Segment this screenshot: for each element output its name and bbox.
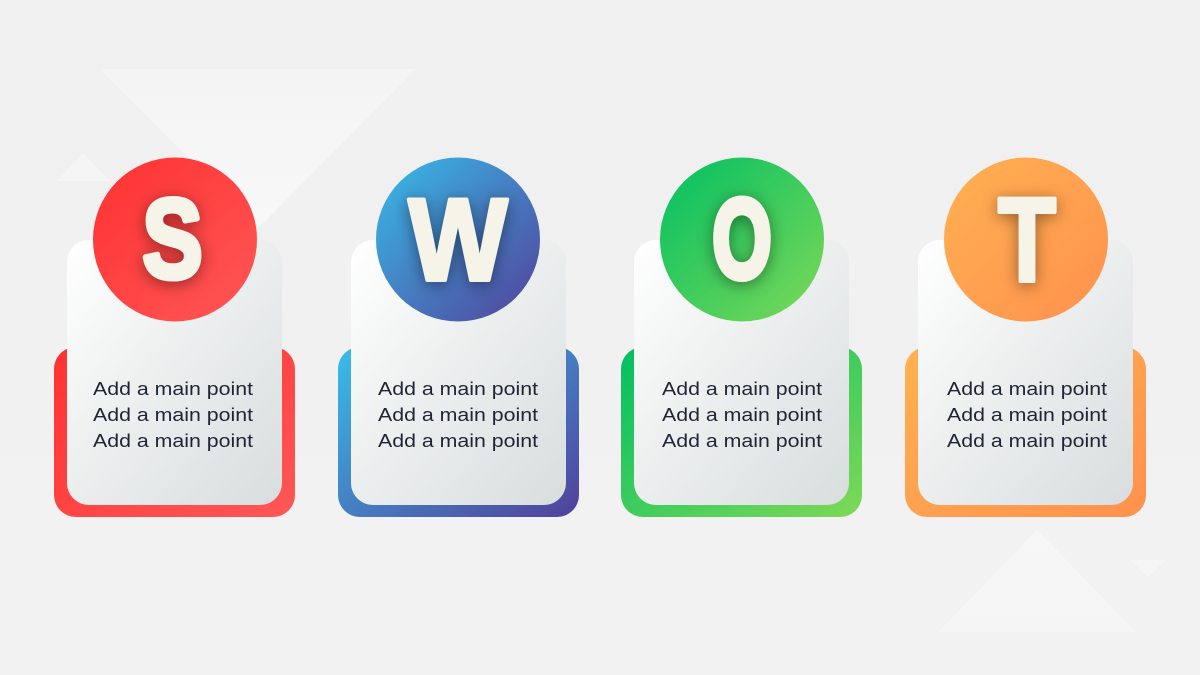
background triangles top left bbox=[57, 0, 416, 228]
text block: Add a main point bbox=[93, 430, 253, 451]
coloured back frame bbox=[338, 347, 579, 517]
background triangles bottom right bbox=[700, 530, 1166, 640]
panel: threats bbox=[905, 158, 1146, 517]
text block: Add a main point bbox=[378, 404, 538, 425]
text block: Add a main point bbox=[662, 378, 822, 399]
letter O: O bbox=[712, 176, 772, 302]
text block: Add a main point bbox=[378, 378, 538, 399]
coloured back frame bbox=[621, 347, 862, 517]
coloured back frame bbox=[905, 347, 1146, 517]
text block bbox=[378, 378, 538, 451]
white card bbox=[67, 240, 282, 505]
badge circle bbox=[944, 158, 1108, 322]
panel: opportunities bbox=[621, 158, 862, 517]
text block: Add a main point bbox=[947, 378, 1107, 399]
text block: Add a main point bbox=[93, 378, 253, 399]
white card bbox=[634, 240, 849, 505]
white card bbox=[918, 240, 1133, 505]
text block bbox=[947, 378, 1107, 451]
panel: weaknesses bbox=[338, 158, 579, 517]
text block bbox=[93, 378, 253, 451]
panel: strengths bbox=[54, 158, 295, 517]
white card bbox=[351, 240, 566, 505]
badge circle bbox=[376, 158, 540, 322]
text block: Add a main point bbox=[93, 404, 253, 425]
text block: Add a main point bbox=[947, 404, 1107, 425]
text block: Add a main point bbox=[662, 404, 822, 425]
badge circle bbox=[93, 158, 257, 322]
letter S: S bbox=[142, 176, 202, 302]
badge circle bbox=[660, 158, 824, 322]
text block: Add a main point bbox=[947, 430, 1107, 451]
text block: Add a main point bbox=[378, 430, 538, 451]
coloured back frame bbox=[54, 347, 295, 517]
letter T: T bbox=[998, 173, 1056, 307]
text block bbox=[662, 378, 822, 451]
letter W: W bbox=[408, 174, 508, 305]
text block: Add a main point bbox=[662, 430, 822, 451]
